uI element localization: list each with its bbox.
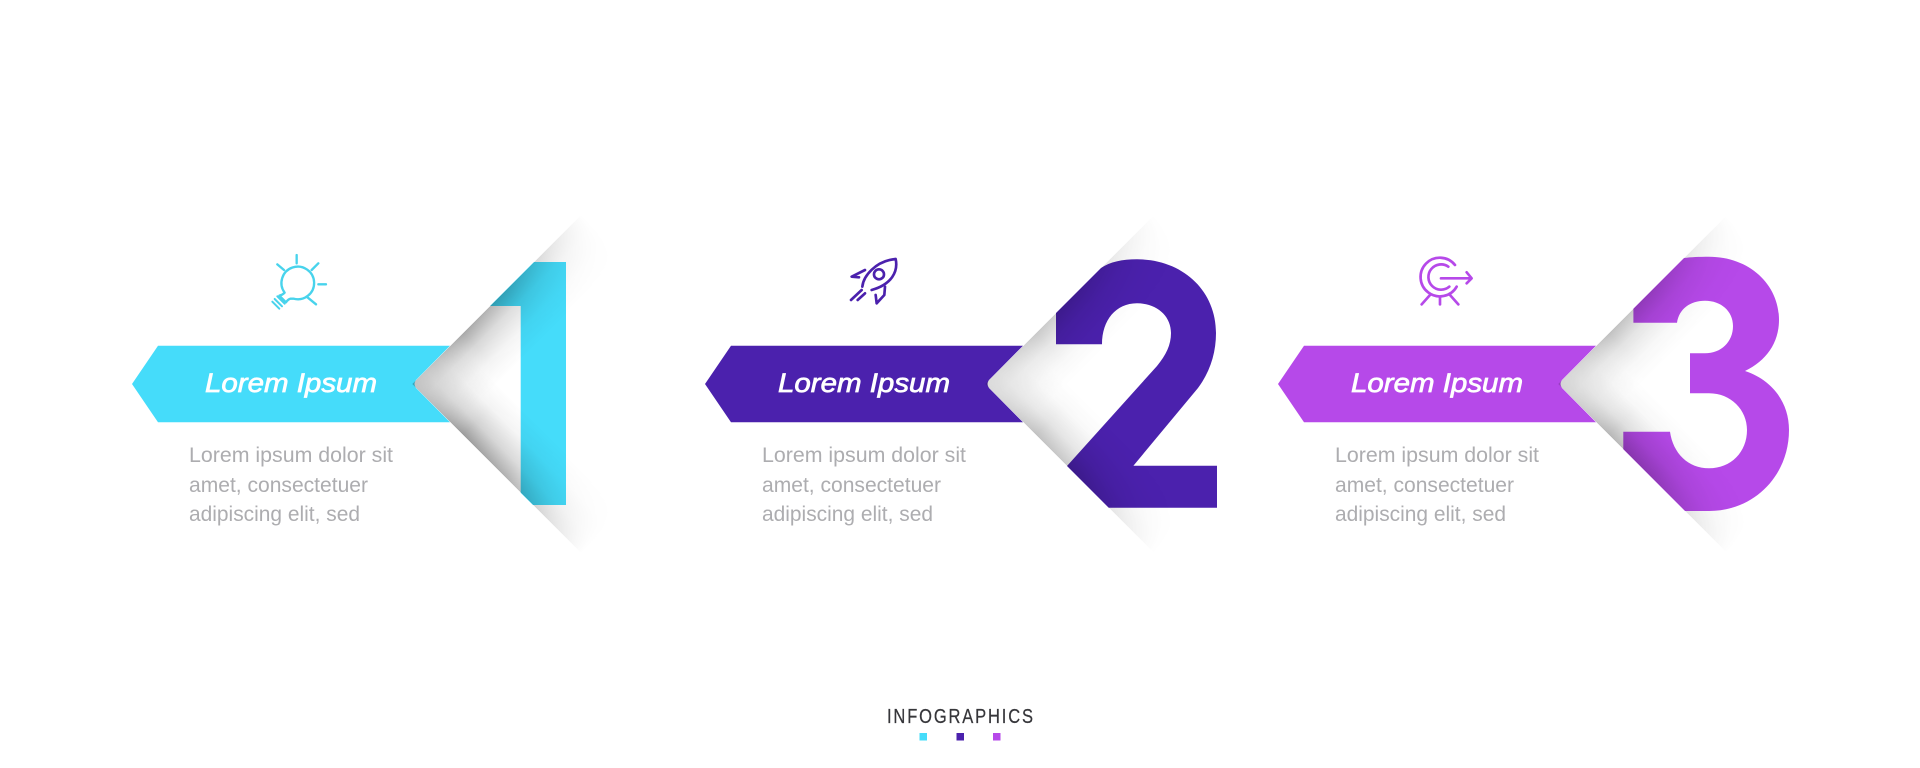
body text: step 3 bbox=[1335, 444, 1539, 526]
icon: target bbox=[1421, 258, 1472, 304]
panel: step 2 bbox=[705, 233, 1217, 538]
numeral 2 bbox=[1056, 259, 1217, 508]
panel: step 1 bbox=[132, 226, 576, 544]
body text: step 2: adipiscing elit, sed bbox=[762, 503, 933, 526]
panel: step 3 bbox=[1278, 214, 1789, 554]
fold shadow: step 1 bbox=[412, 226, 576, 544]
body text: step 1: Lorem ipsum dolor sit bbox=[189, 444, 393, 467]
body text: step 2: amet, consectetuer bbox=[762, 474, 941, 497]
body text: step 2: Lorem ipsum dolor sit bbox=[762, 444, 966, 467]
body text: step 2 bbox=[762, 444, 966, 526]
numeral 1 bbox=[490, 262, 566, 505]
fold shadow: step 2 bbox=[986, 233, 1140, 538]
body text: step 3: amet, consectetuer bbox=[1335, 474, 1514, 497]
banner: step 2 bbox=[705, 346, 1023, 422]
fold shadow: step 3 bbox=[1558, 230, 1716, 540]
numeral 3 bbox=[1623, 257, 1789, 511]
heading: step 3: Lorem Ipsum bbox=[1351, 368, 1523, 398]
body text: step 1: amet, consectetuer bbox=[189, 474, 368, 497]
icon: rocket bbox=[851, 259, 896, 303]
footer colour squares bbox=[920, 733, 1000, 740]
body text: step 3: Lorem ipsum dolor sit bbox=[1335, 444, 1539, 467]
banner: step 3 bbox=[1278, 346, 1596, 422]
icon: light bulb bbox=[272, 255, 326, 309]
heading: step 1: Lorem Ipsum bbox=[205, 368, 377, 398]
body text: step 3: adipiscing elit, sed bbox=[1335, 503, 1506, 526]
body text: step 1 bbox=[189, 444, 393, 526]
body text: step 1: adipiscing elit, sed bbox=[189, 503, 360, 526]
footer title: INFOGRAPHICS bbox=[887, 704, 1033, 727]
banner: step 1 bbox=[132, 346, 450, 422]
heading: step 2: Lorem Ipsum bbox=[778, 368, 950, 398]
